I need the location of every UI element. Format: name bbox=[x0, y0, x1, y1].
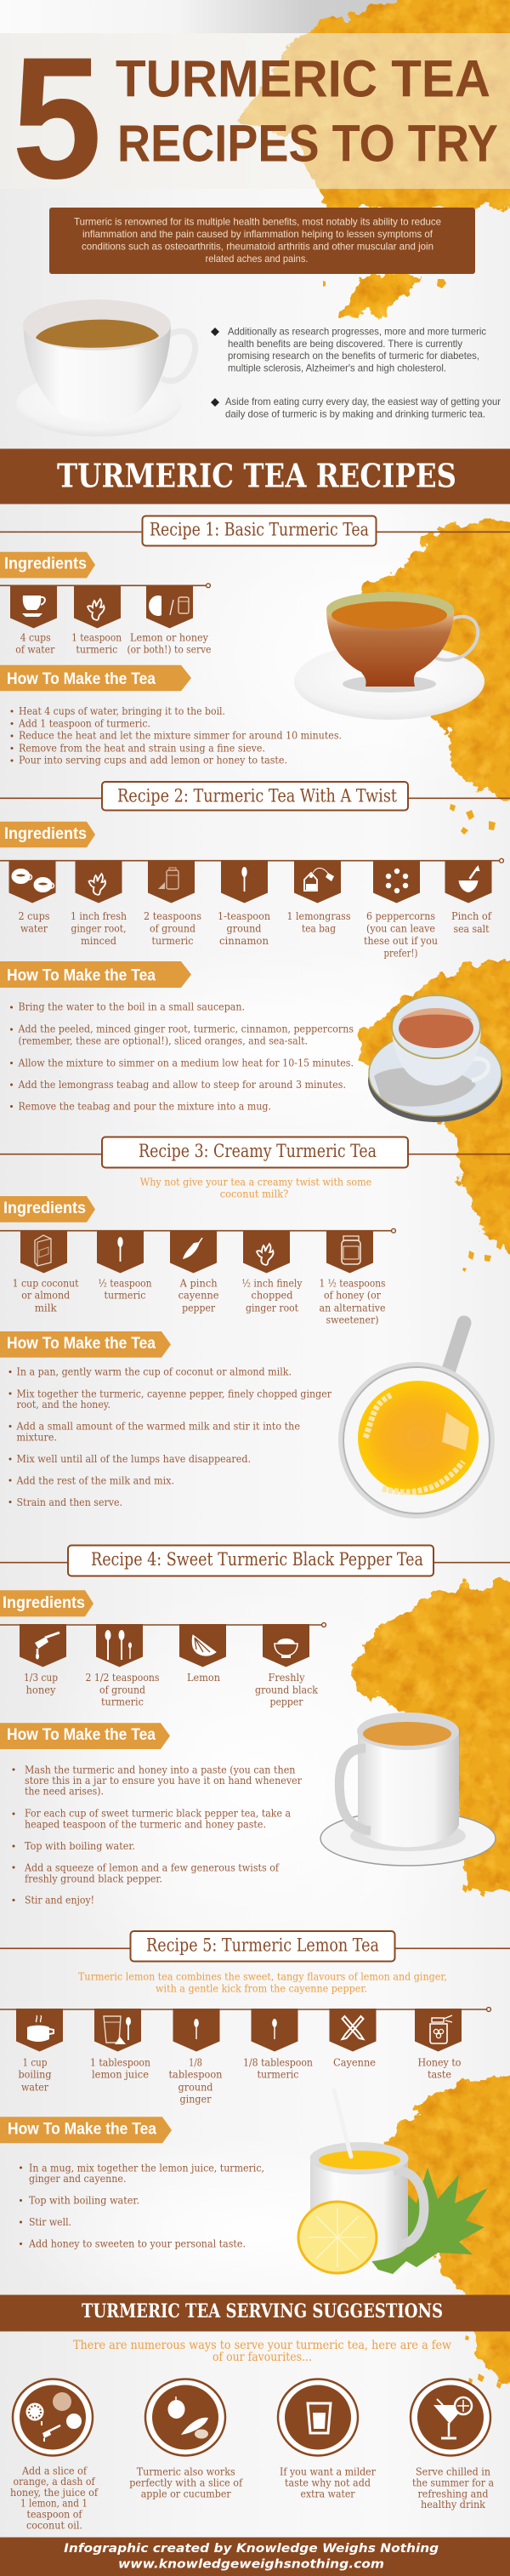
ingredient: sea salt: Pinch of bbox=[451, 910, 492, 922]
ingredient: cayenne bbox=[330, 2009, 376, 2068]
ingredient: lemon: Lemon bbox=[187, 1672, 220, 1684]
heading banner: serving suggestions bbox=[0, 2295, 510, 2331]
how to tag: How To Make the Tea bbox=[8, 2120, 156, 2138]
ingredient: peppercorns: these out if you bbox=[364, 935, 438, 947]
bullet text: research: Additionally as research progresses, more and more turmeric bbox=[228, 325, 486, 337]
how to tag: How To Make the Tea bbox=[7, 1335, 156, 1353]
recipe 5 heading bbox=[0, 1931, 510, 1962]
method list: freshly ground black pepper. bbox=[25, 1873, 162, 1885]
ingredient: honey bbox=[415, 2009, 462, 2081]
ingredient: ground ginger bbox=[168, 2009, 223, 2106]
illustration: cup from above on saucer bbox=[368, 995, 502, 1122]
recipe 3 heading: Recipe 3: Creamy Turmeric Tea bbox=[139, 1141, 377, 1161]
orange intro text: Turmeric lemon tea combines the sweet, tangy flavours of lemon and ginger, bbox=[78, 1970, 447, 1982]
ingredient: honey: an alternative bbox=[320, 1302, 386, 1314]
ingredient: peppercorns: prefer!) bbox=[384, 947, 418, 959]
method list: Reduce the heat and let the mixture simmer for around 10 minutes. bbox=[19, 730, 342, 742]
intro box: Turmeric is renowned for its multiple health benefits, most notably its ability to reduce bbox=[74, 216, 441, 228]
heading banner: Turmeric Tea Recipes bbox=[0, 449, 510, 504]
ingredient: cayenne: A pinch bbox=[179, 1278, 218, 1290]
label: extra water bbox=[301, 2488, 355, 2499]
method list bbox=[10, 1001, 354, 1112]
orange intro text bbox=[73, 2339, 451, 2364]
numeral 5: 5 bbox=[12, 21, 102, 215]
label: orange, a dash of bbox=[14, 2476, 96, 2488]
suggestion 4 bbox=[411, 2379, 494, 2510]
ingredient: water bbox=[10, 585, 57, 656]
label: taste why not add bbox=[285, 2476, 371, 2488]
panel: recipe 2 bbox=[0, 782, 510, 1122]
method list: root, and the honey. bbox=[17, 1399, 110, 1411]
ingredient: ginger: ½ inch finely bbox=[241, 1278, 303, 1290]
how to tag bbox=[0, 2117, 172, 2143]
ingredient: peppercorns: (you can leave bbox=[366, 923, 435, 935]
ingredient: ground turmeric: 2 1/2 teaspoons bbox=[85, 1672, 160, 1684]
method list: the need arises). bbox=[25, 1786, 104, 1798]
how to tag bbox=[0, 961, 191, 988]
orange intro text: There are numerous ways to serve your turmeric tea, here are a few bbox=[73, 2339, 451, 2352]
icon: glass of water bbox=[278, 2379, 358, 2455]
intro box: inflammation and the pain caused by inflammation helping to lessen symptoms of bbox=[82, 228, 434, 240]
ingredient: water bbox=[8, 860, 56, 935]
panel: recipe 4 bbox=[0, 1545, 510, 1906]
method list: store this in a jar to ensure you have it on hand whenever bbox=[25, 1775, 302, 1787]
ingredients tag bbox=[0, 822, 95, 847]
ingredient: boiling water bbox=[16, 2009, 63, 2093]
ingredient: cinnamon: cinnamon bbox=[219, 935, 269, 947]
ingredient: lemongrass tea bag bbox=[287, 860, 350, 935]
ingredient: sea salt bbox=[445, 860, 492, 935]
method list: Add the peeled, minced ginger root, turmeric, cinnamon, peppercorns bbox=[18, 1023, 354, 1034]
ingredient: milk: milk bbox=[35, 1302, 57, 1314]
label: Serve chilled in bbox=[416, 2466, 490, 2478]
orange intro text: coconut milk? bbox=[220, 1188, 288, 1200]
method list: Mix together the turmeric, cayenne pepper, finely chopped ginger bbox=[17, 1388, 332, 1399]
turmeric powder: spill under intro bbox=[342, 274, 423, 320]
recipe 5 heading: Recipe 5: Turmeric Lemon Tea bbox=[146, 1935, 379, 1955]
ingredient: honey bbox=[320, 1230, 386, 1326]
method list: Add 1 teaspoon of turmeric. bbox=[18, 717, 150, 729]
ingredients line bbox=[0, 584, 210, 588]
ingredient: honey: honey bbox=[26, 1684, 56, 1695]
method list: Bring the water to the boil in a small saucepan. bbox=[19, 1001, 245, 1013]
ingredient: water: of water bbox=[15, 644, 55, 656]
method list: Add the lemongrass teabag and allow to steep for around 3 minutes. bbox=[18, 1079, 346, 1091]
how to tag: How To Make the Tea bbox=[7, 967, 156, 985]
label: healthy drink bbox=[421, 2499, 486, 2510]
method list: Stir and enjoy! bbox=[25, 1895, 94, 1906]
ingredient: turmeric bbox=[97, 1230, 152, 1302]
ingredient: boiling water: boiling bbox=[19, 2069, 52, 2081]
orange intro text bbox=[140, 1176, 371, 1200]
ingredient: cayenne: Cayenne bbox=[333, 2056, 376, 2068]
ingredient: black pepper: ground black bbox=[255, 1684, 319, 1695]
recipe 1 heading bbox=[0, 516, 510, 546]
ingredient: cayenne: cayenne bbox=[178, 1290, 219, 1302]
ingredient: lemon juice bbox=[90, 2009, 150, 2081]
ingredients tag: Ingredients bbox=[3, 1200, 86, 1217]
ingredient: ginger bbox=[71, 860, 127, 947]
ingredient: black pepper: Freshly bbox=[269, 1672, 305, 1684]
turmeric powder: recipe 4 bbox=[353, 1582, 510, 1897]
method list: Add a squeeze of lemon and a few generous twists of bbox=[24, 1861, 280, 1873]
illustration: glass cup on saucer bbox=[294, 592, 484, 720]
ingredient: turmeric bbox=[243, 2009, 313, 2081]
label: refreshing and bbox=[418, 2488, 489, 2499]
recipe 2 heading: Recipe 2: Turmeric Tea With A Twist bbox=[117, 786, 397, 806]
ingredient: turmeric bbox=[71, 585, 122, 656]
panel: recipe 3 bbox=[0, 1137, 510, 1519]
ingredient: ground turmeric: turmeric bbox=[151, 935, 194, 947]
ingredient: peppercorns: 6 peppercorns bbox=[366, 910, 435, 922]
ingredient: cinnamon: ground bbox=[226, 923, 262, 935]
ingredient: peppercorns bbox=[364, 860, 438, 959]
label: perfectly with a slice of bbox=[129, 2476, 244, 2488]
turmeric powder: header bbox=[238, 0, 510, 211]
ingredients line bbox=[0, 1228, 395, 1233]
label bbox=[412, 2466, 494, 2510]
title line 1: TURMERIC TEA bbox=[116, 49, 490, 107]
ingredient: boiling water: water bbox=[21, 2081, 48, 2093]
recipe 4 heading bbox=[0, 1545, 510, 1576]
icon: citrus, honey, coconut bbox=[13, 2379, 93, 2455]
ingredient: ground ginger: tablespoon bbox=[168, 2069, 223, 2081]
label: the summer for a bbox=[412, 2476, 494, 2488]
scattered powder flecks bbox=[323, 279, 507, 2389]
ingredient: milk: or almond bbox=[21, 1290, 70, 1302]
ingredient: lemongrass tea bag: tea bag bbox=[302, 923, 336, 935]
icon: cocktail bbox=[411, 2379, 490, 2455]
illustration: pan of golden milk from above bbox=[338, 1323, 495, 1519]
heading banner: serving suggestions: TURMERIC TEA SERVING SUGGESTIONS bbox=[82, 2300, 443, 2322]
orange intro text bbox=[78, 1970, 447, 1995]
ingredient: ginger: minced bbox=[81, 935, 116, 947]
ingredient: ground ginger: ground bbox=[178, 2081, 213, 2093]
label: teaspoon of bbox=[27, 2509, 83, 2521]
ingredients tag bbox=[0, 1590, 94, 1616]
ingredient: turmeric: turmeric bbox=[76, 644, 118, 656]
method list: Stir well. bbox=[29, 2216, 71, 2228]
method list: In a pan, gently warm the cup of coconut or almond milk. bbox=[17, 1366, 292, 1378]
ingredient: turmeric: turmeric bbox=[257, 2069, 299, 2081]
intro box: conditions such as osteoarthritis, rheumatoid arthritis and other muscular and join bbox=[82, 240, 434, 252]
ingredient: milk: 1 cup coconut bbox=[13, 1278, 79, 1290]
suggestion 2 bbox=[129, 2379, 244, 2499]
ingredient: water: 2 cups bbox=[19, 910, 49, 922]
ingredients tag: Ingredients bbox=[3, 1594, 85, 1612]
method list: Strain and then serve. bbox=[17, 1496, 122, 1508]
method list: Mash the turmeric and honey into a paste (you can then bbox=[25, 1764, 296, 1775]
bullet text: curry: daily dose of turmeric is by making and drinking turmeric tea. bbox=[225, 408, 485, 420]
translucent title band bbox=[0, 33, 510, 189]
label: 1 lemon, and 1 bbox=[20, 2498, 88, 2510]
suggestion 1 bbox=[10, 2379, 99, 2531]
orange intro text: Why not give your tea a creamy twist with some bbox=[140, 1176, 371, 1188]
ingredient: ginger: ginger root bbox=[246, 1302, 298, 1314]
method list: Pour into serving cups and add lemon or honey to taste. bbox=[19, 755, 287, 767]
how to tag bbox=[0, 1331, 171, 1358]
method list bbox=[20, 2162, 264, 2250]
method list: Add honey to sweeten to your personal taste. bbox=[28, 2238, 246, 2250]
label: If you want a milder bbox=[280, 2466, 376, 2478]
recipe 1 heading: Recipe 1: Basic Turmeric Tea bbox=[150, 519, 369, 539]
ingredient: ginger: 1 inch fresh bbox=[71, 910, 127, 922]
ingredient: honey bbox=[20, 1624, 66, 1695]
label: honey, the juice of bbox=[10, 2487, 99, 2499]
ingredients tag bbox=[0, 1196, 95, 1222]
method list: Add the rest of the milk and mix. bbox=[16, 1474, 174, 1486]
method list: For each cup of sweet turmeric black pepper tea, take a bbox=[25, 1808, 291, 1820]
method list bbox=[12, 1764, 302, 1906]
ingredient: black pepper bbox=[255, 1624, 319, 1708]
ingredient: cayenne bbox=[170, 1230, 219, 1314]
ingredient: turmeric: ½ teaspoon bbox=[99, 1278, 152, 1290]
how to tag: How To Make the Tea bbox=[7, 1726, 156, 1744]
method list: Mix well until all of the lumps have disappeared. bbox=[17, 1453, 251, 1465]
ingredient: honey: sweetener) bbox=[326, 1314, 379, 1326]
title bbox=[12, 21, 498, 215]
ingredient: honey: 1 ½ teaspoons bbox=[320, 1278, 386, 1290]
panel: recipe 1 bbox=[0, 516, 510, 767]
method list: Remove from the heat and strain using a fine sieve. bbox=[19, 742, 265, 754]
method list: heaped teaspoon of the turmeric and honey paste. bbox=[25, 1818, 266, 1830]
method list: Remove the teabag and pour the mixture into a mug. bbox=[19, 1100, 271, 1112]
ingredient: ground turmeric: 2 teaspoons bbox=[144, 910, 201, 922]
ingredient: turmeric: 1/8 tablespoon bbox=[243, 2056, 313, 2068]
ingredient: water: 4 cups bbox=[20, 631, 51, 643]
ingredient: black pepper: pepper bbox=[270, 1696, 303, 1708]
ingredient: ginger bbox=[241, 1230, 303, 1314]
ingredient: lemon juice: lemon juice bbox=[92, 2069, 149, 2081]
label: Add a slice of bbox=[21, 2465, 88, 2476]
how to tag bbox=[0, 1723, 170, 1749]
method list bbox=[10, 705, 342, 767]
ingredient: honey: taste bbox=[428, 2069, 451, 2081]
turmeric powder: recipe 1 bbox=[364, 519, 510, 808]
ingredient: lemongrass tea bag: 1 lemongrass bbox=[287, 910, 350, 922]
illustration: white teacup bbox=[16, 299, 196, 436]
label: Turmeric also works bbox=[137, 2466, 235, 2478]
orange intro text: of our favourites... bbox=[212, 2351, 312, 2364]
method list: Top with boiling water. bbox=[25, 1840, 135, 1852]
label bbox=[280, 2466, 376, 2499]
ingredient: turmeric: 1 teaspoon bbox=[71, 631, 122, 643]
how to tag bbox=[0, 665, 191, 691]
method list: ginger and cayenne. bbox=[29, 2173, 126, 2185]
method list: mixture. bbox=[17, 1431, 57, 1443]
ingredients tag bbox=[0, 552, 95, 578]
bullet text: research: health benefits are being discovered. There is currently bbox=[228, 338, 462, 350]
label bbox=[129, 2466, 244, 2499]
ingredient: cinnamon: 1-teaspoon bbox=[218, 910, 270, 922]
intro box: related aches and pains. bbox=[206, 253, 308, 265]
illustration: mug with lemon slice and leaves bbox=[298, 2090, 488, 2274]
ingredient: lemon or honey: (or both!) to serve bbox=[128, 644, 211, 656]
ingredient: cinnamon bbox=[218, 860, 270, 947]
method list: (remember, these are optional!), sliced oranges, and sea-salt. bbox=[19, 1035, 308, 1047]
ingredients line bbox=[0, 2008, 490, 2011]
method list: Heat 4 cups of water, bringing it to the boil. bbox=[19, 705, 225, 717]
ingredients tag: Ingredients bbox=[4, 555, 87, 573]
ingredient: lemon or honey bbox=[128, 585, 211, 656]
method list: In a mug, mix together the lemon juice, turmeric, bbox=[29, 2162, 264, 2174]
bullet text: research bbox=[211, 325, 486, 374]
recipe 2 heading bbox=[0, 782, 510, 810]
ingredient: honey: 1/3 cup bbox=[24, 1672, 58, 1684]
ingredients line bbox=[0, 858, 503, 863]
ingredient: ground turmeric: of ground bbox=[99, 1684, 145, 1695]
turmeric powder: recipe 2 and 3 bbox=[359, 961, 510, 1259]
ingredient: lemon or honey: Lemon or honey bbox=[130, 631, 208, 643]
panel: recipe 5 bbox=[0, 1931, 510, 2274]
turmeric powder: recipe 5 and footer bbox=[382, 2076, 510, 2391]
footer bbox=[0, 2537, 510, 2576]
ingredient: ground ginger: 1/8 bbox=[189, 2056, 202, 2068]
intro box bbox=[49, 208, 475, 274]
ingredients tag: Ingredients bbox=[4, 825, 87, 843]
ingredient: ground turmeric: turmeric bbox=[101, 1696, 144, 1708]
footer: www.knowledgeweighsnothing.com bbox=[118, 2558, 384, 2572]
label: coconut oil. bbox=[26, 2519, 82, 2531]
ingredient: ground turmeric bbox=[144, 860, 201, 947]
ingredients line bbox=[0, 1623, 326, 1627]
method list: Add a small amount of the warmed milk and stir it into the bbox=[16, 1421, 300, 1433]
method list: Allow the mixture to simmer on a medium low heat for 10-15 minutes. bbox=[18, 1057, 354, 1069]
bullet text: curry bbox=[211, 396, 501, 420]
label bbox=[10, 2465, 99, 2531]
ingredient: boiling water: 1 cup bbox=[22, 2056, 48, 2068]
ingredient: milk bbox=[13, 1230, 79, 1314]
method list bbox=[8, 1366, 332, 1508]
recipe 4 heading: Recipe 4: Sweet Turmeric Black Pepper Tea bbox=[91, 1549, 423, 1570]
ingredient: honey: Honey to bbox=[418, 2056, 461, 2068]
method list: Top with boiling water. bbox=[29, 2195, 139, 2207]
footer: Infographic created by Knowledge Weighs Nothing bbox=[64, 2542, 439, 2556]
icon: apple and cucumber bbox=[145, 2379, 225, 2455]
illustration: white mug on saucer bbox=[320, 1713, 496, 1866]
ingredient: honey: of honey (or bbox=[324, 1290, 381, 1302]
ingredient: ground ginger: ginger bbox=[180, 2094, 212, 2106]
ingredient: lemon bbox=[179, 1624, 226, 1684]
ingredient: ground turmeric bbox=[85, 1624, 160, 1708]
orange intro text: with a gentle kick from the cayenne pepper. bbox=[156, 1983, 367, 1995]
recipe 3 heading bbox=[0, 1137, 510, 1167]
ingredient: turmeric: turmeric bbox=[104, 1290, 146, 1302]
bullet text: research: promising research on the benefits of turmeric for diabetes, bbox=[228, 350, 479, 362]
ingredient: cayenne: pepper bbox=[182, 1302, 215, 1314]
ingredient: sea salt: sea salt bbox=[454, 923, 490, 935]
ingredient: ginger: ginger root, bbox=[71, 923, 126, 935]
ingredient: lemon juice: 1 tablespoon bbox=[90, 2056, 150, 2068]
suggestion 3 bbox=[278, 2379, 376, 2499]
ingredient: water: water bbox=[20, 923, 48, 935]
bullet text: research: multiple sclerosis, Alzheimer's and high cholesterol. bbox=[228, 362, 446, 374]
ingredient: ground turmeric: of ground bbox=[150, 923, 196, 935]
ingredient: ginger: chopped bbox=[252, 1290, 293, 1302]
label: apple or cucumber bbox=[141, 2488, 231, 2499]
how to tag: How To Make the Tea bbox=[7, 670, 156, 688]
